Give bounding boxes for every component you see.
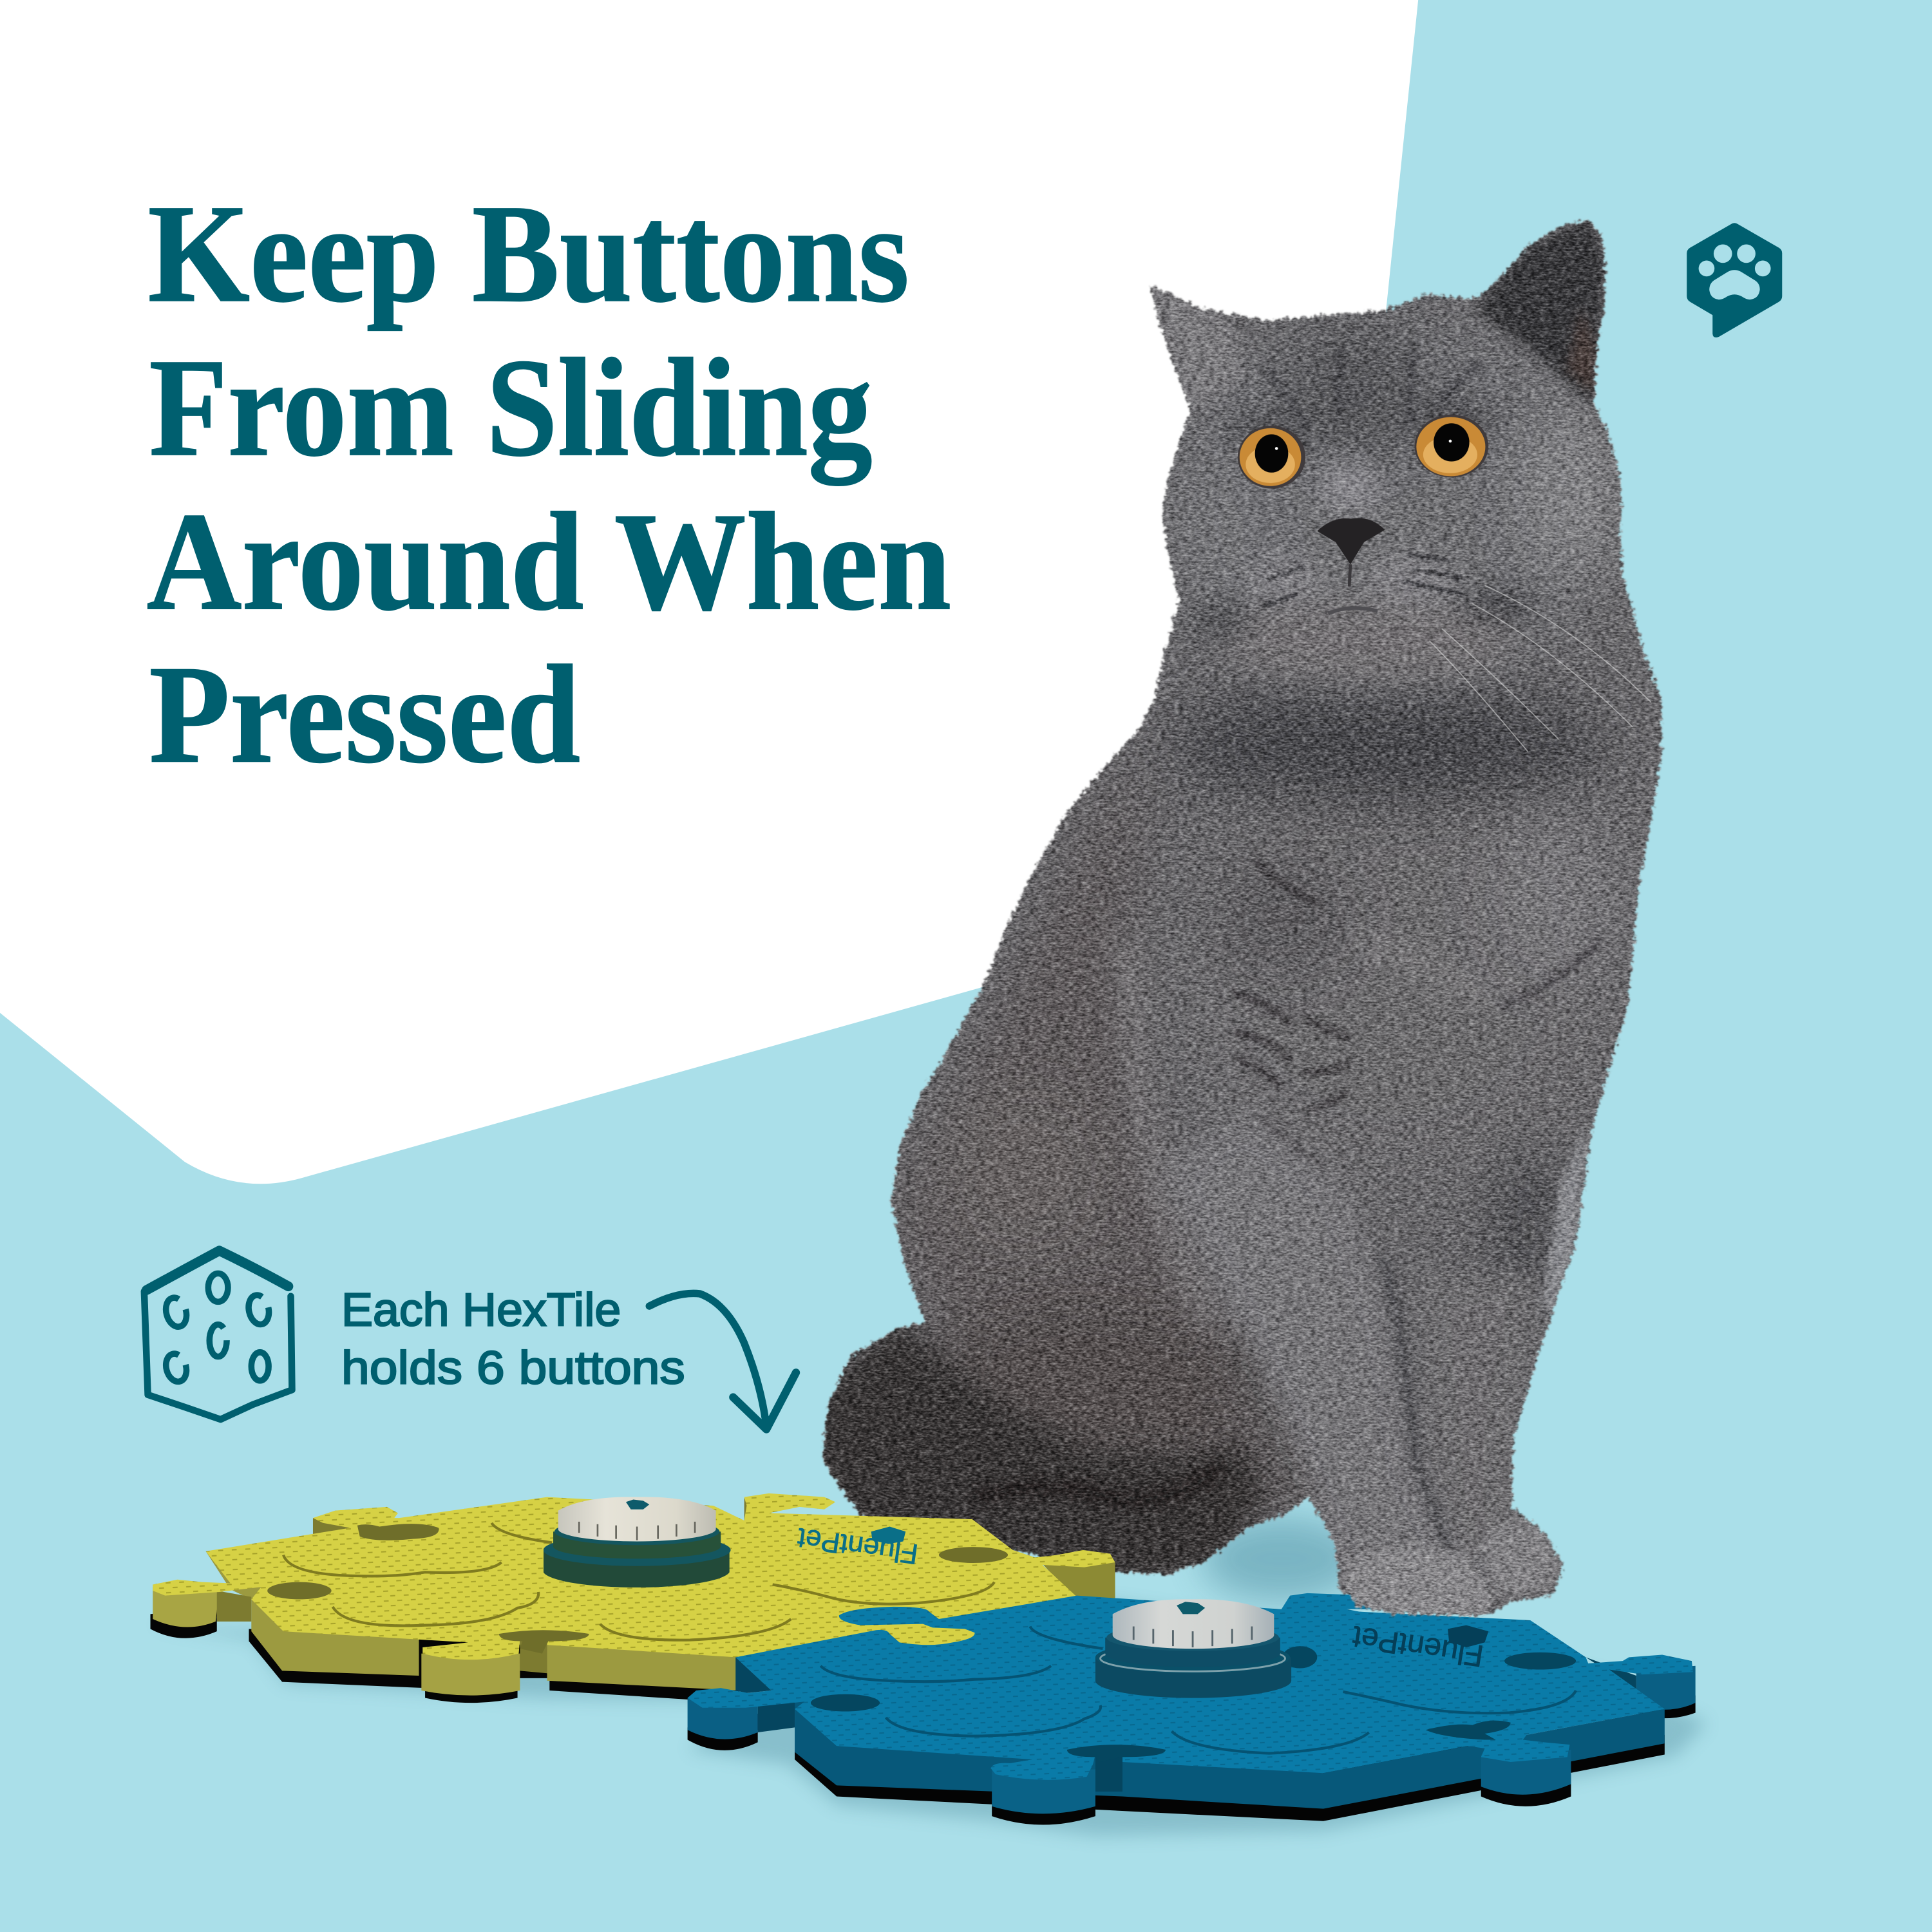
chest and neck (1171, 684, 1620, 1318)
yellow hextile (150, 1493, 1115, 1703)
chest V fold (1499, 939, 1600, 1008)
logo text on tile: FluentPet (1350, 1619, 1486, 1673)
shadow between legs (1384, 1258, 1460, 1577)
recessed paw outlines (283, 1523, 994, 1640)
black base (795, 1735, 1665, 1821)
top face (688, 1593, 1693, 1780)
sockets (811, 1694, 880, 1712)
side walls (206, 1551, 739, 1690)
blue hextile (688, 1593, 1696, 1825)
title: From Sliding (149, 330, 873, 486)
title: Keep Buttons (148, 176, 909, 332)
top face (153, 1493, 1115, 1660)
haunch (891, 822, 1264, 1461)
white panel (0, 0, 1418, 1184)
light leg boundary (1128, 936, 1210, 1331)
black base (249, 1629, 739, 1703)
cat eyes, nose and whiskers (1238, 415, 1651, 752)
icon: FluentPet paw speech-bubble logo (1687, 223, 1782, 337)
pale fringe on the right flank (1540, 1121, 1589, 1318)
title (147, 176, 951, 792)
recessed paw outlines (820, 1627, 1576, 1754)
head (1164, 314, 1623, 684)
whisker spots (1263, 554, 1466, 606)
cat front paw resting over the tile (1345, 1565, 1493, 1615)
tail (807, 1318, 1269, 1589)
cat (820, 218, 1665, 1616)
sockets (357, 1524, 439, 1540)
side walls (735, 1657, 1665, 1809)
yellow tile button (544, 1497, 731, 1587)
near front leg (1158, 1109, 1479, 1614)
icon: hextile with six button spots (144, 1251, 292, 1419)
callout text (341, 1284, 685, 1394)
arrow (649, 1293, 796, 1429)
blue tile button (1095, 1599, 1291, 1698)
logo text on tile: FluentPet (795, 1522, 920, 1570)
floor shadow under tiles and cat (148, 1517, 1707, 1836)
callout text: holds 6 buttons (341, 1342, 685, 1394)
forehead stripes (1269, 351, 1479, 425)
title: Around When (147, 484, 951, 639)
back front leg (1450, 1265, 1538, 1361)
callout text: Each HexTile (341, 1284, 621, 1336)
fur stripes on the chest (1236, 862, 1349, 1164)
ears (1476, 220, 1605, 406)
paws (1345, 1522, 1560, 1614)
title: Pressed (149, 637, 580, 792)
